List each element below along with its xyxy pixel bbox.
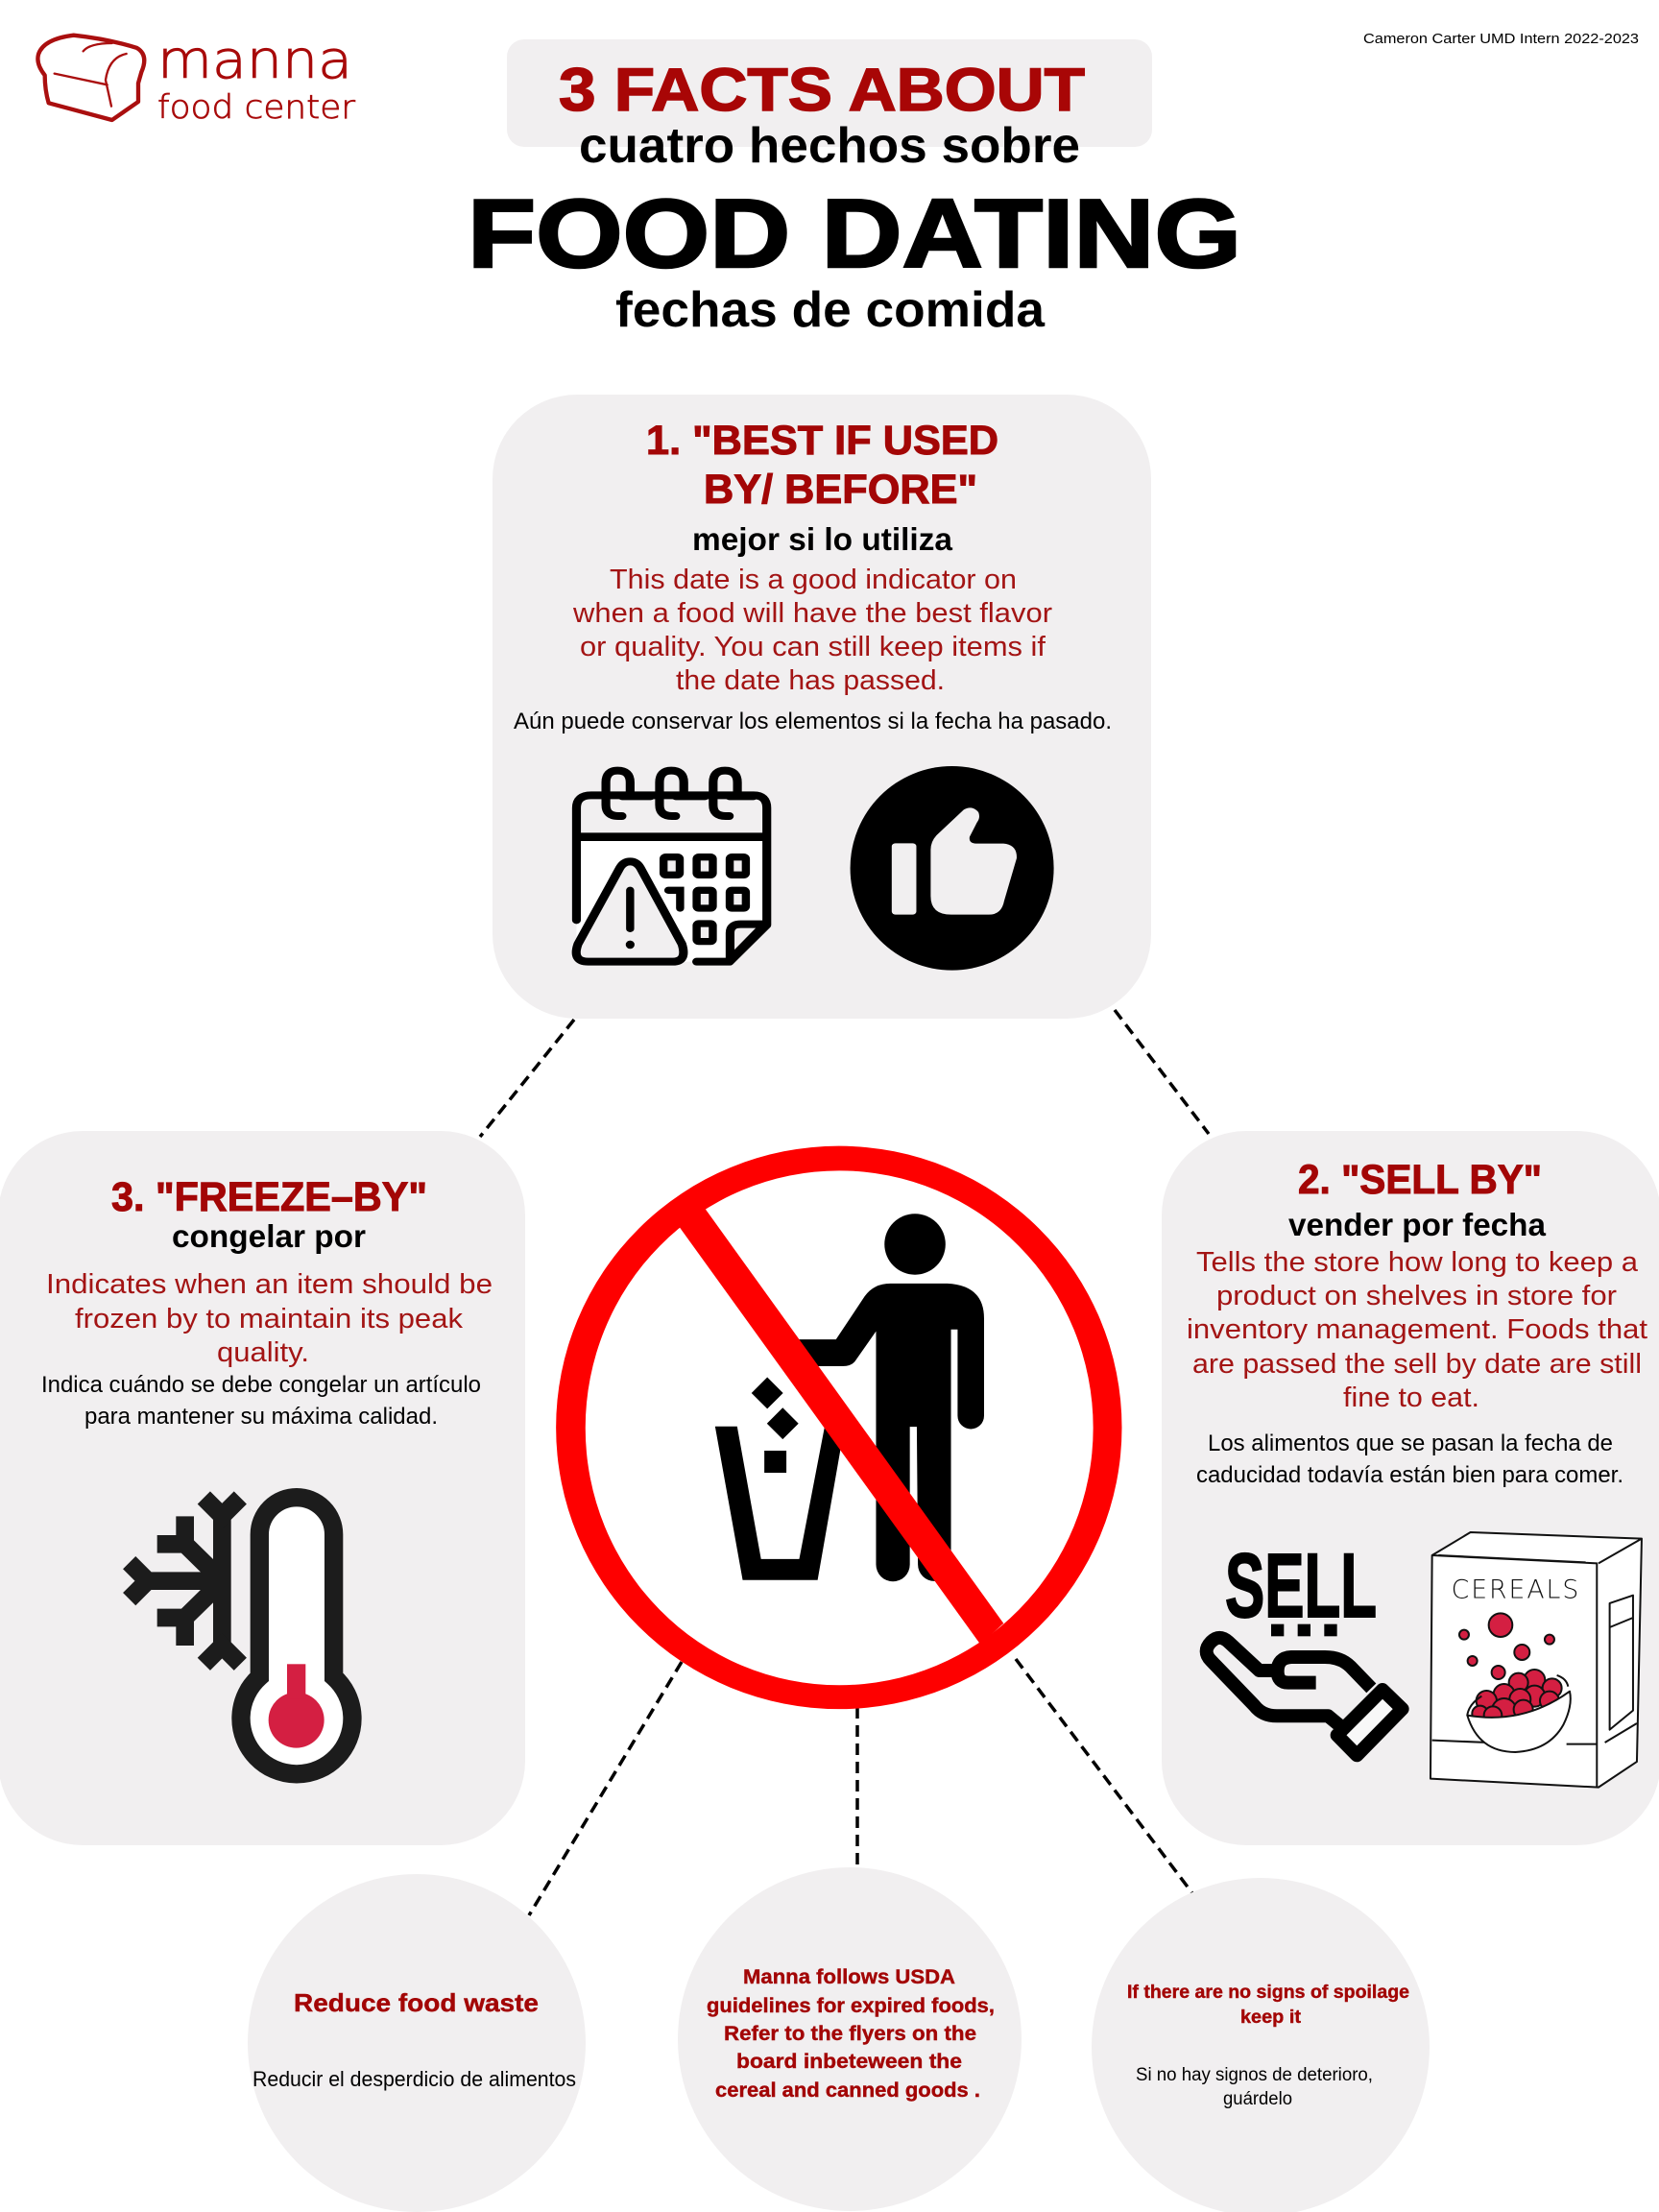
connector: bottom right [1016,1659,1192,1893]
callout circle: manna follows usda: guidelines for expired foods, [707,1995,995,2017]
red description: when a food will have the best flavor [572,598,1052,629]
panel: freeze by [0,1131,525,1845]
title: cuatro hechos sobre: cuatro hechos sobre [579,118,1080,174]
heading: best if used by: BY/ BEFORE" [704,467,977,513]
callout circle: reduce food waste: Reduce food waste [294,1988,539,2017]
red description: frozen by to maintain its peak [75,1304,464,1334]
spanish description: Indica cuándo se debe congelar un artículo [41,1372,481,1398]
credit line: Cameron Carter UMD Intern 2022-2023 [1363,31,1639,47]
red description: quality. [217,1337,309,1368]
title: fechas de comida: fechas de comida [615,282,1046,338]
red description: This date is a good indicator on [610,565,1017,595]
callout circle: manna follows usda: Manna follows USDA [743,1966,955,1988]
spanish description [41,1372,481,1430]
callout circle: no signs of spoilage [1092,1878,1430,2212]
red description [1187,1247,1647,1413]
title badge background [507,39,1152,147]
connector: top left [480,1020,574,1137]
callout circle: manna follows usda [678,1867,1022,2211]
logo: manna food center: food center [157,88,355,127]
subheading: vender por fecha: vender por fecha [1288,1207,1547,1242]
red description: product on shelves in store for [1216,1281,1617,1311]
red description [572,565,1052,696]
connector: bottom left [529,1662,682,1915]
logo: manna food center: manna [157,30,352,90]
spanish description: para mantener su máxima calidad. [84,1404,438,1430]
heading: sell by: 2. "SELL BY" [1298,1157,1542,1203]
callout circle: reduce food waste [248,1874,586,2212]
red description: the date has passed. [676,665,945,696]
red description: fine to eat. [1343,1382,1479,1413]
icon: thermometer and snowflake [130,1498,352,1774]
red prohibition ring and slash [556,1146,1121,1709]
title: food dating: FOOD DATING [468,180,1241,288]
connector: top right [1115,1010,1209,1134]
icon: thumbs up [851,766,1054,971]
logo: manna food center [37,30,355,127]
heading: best if used by [646,418,998,513]
person figure [775,1284,984,1581]
red description [46,1269,493,1368]
red description: Indicates when an item should be [46,1269,493,1300]
spanish description [1196,1431,1623,1488]
connector: bottom middle [855,1707,859,1864]
subheading: congelar por: congelar por [172,1218,366,1254]
icon: cereal box [1431,1532,1642,1788]
person head [884,1214,946,1275]
heading: best if used by: 1. "BEST IF USED [646,418,998,464]
spanish description: Los alimentos que se pasan la fecha de [1208,1431,1613,1456]
red description: inventory management. Foods that [1187,1314,1647,1345]
panel: sell by [1162,1131,1659,1845]
callout circle: reduce food waste: Reducir el desperdicio de alimentos [252,2067,576,2091]
spanish description: Aún puede conservar los elementos si la fecha ha pasado. [514,709,1112,734]
spanish description: caducidad todavía están bien para comer. [1196,1462,1623,1488]
callout circle: no signs of spoilage: guárdelo [1223,2089,1292,2109]
heading: freeze by: 3. "FREEZE–BY" [111,1174,427,1220]
subheading: mejor si lo utiliza: mejor si lo utiliza [692,521,953,557]
icon: cereal box: CEREALS [1452,1575,1578,1604]
callout circle: no signs of spoilage: Si no hay signos de deterioro, [1136,2065,1373,2085]
callout circle: manna follows usda: Refer to the flyers on the [724,2023,976,2045]
icon: sell hand [1207,1535,1403,1755]
icon: calendar with warning [576,771,767,962]
title: 3 facts about: 3 FACTS ABOUT [559,57,1085,124]
panel: best if used by [493,395,1151,1019]
callout circle: no signs of spoilage: If there are no signs of spoilage [1127,1983,1409,2003]
callout circle: manna follows usda: cereal and canned goods . [715,2080,980,2102]
icon: no littering sign [556,1146,1121,1709]
callout circle: no signs of spoilage: keep it [1240,2008,1302,2028]
icon: sell hand: SELL [1225,1535,1377,1637]
red description: Tells the store how long to keep a [1196,1247,1639,1278]
red description: are passed the sell by date are still [1192,1349,1642,1380]
callout circle: manna follows usda: board inbeteween the [736,2051,962,2073]
red description: or quality. You can still keep items if [580,632,1046,662]
litter bin and trash [715,1377,845,1580]
